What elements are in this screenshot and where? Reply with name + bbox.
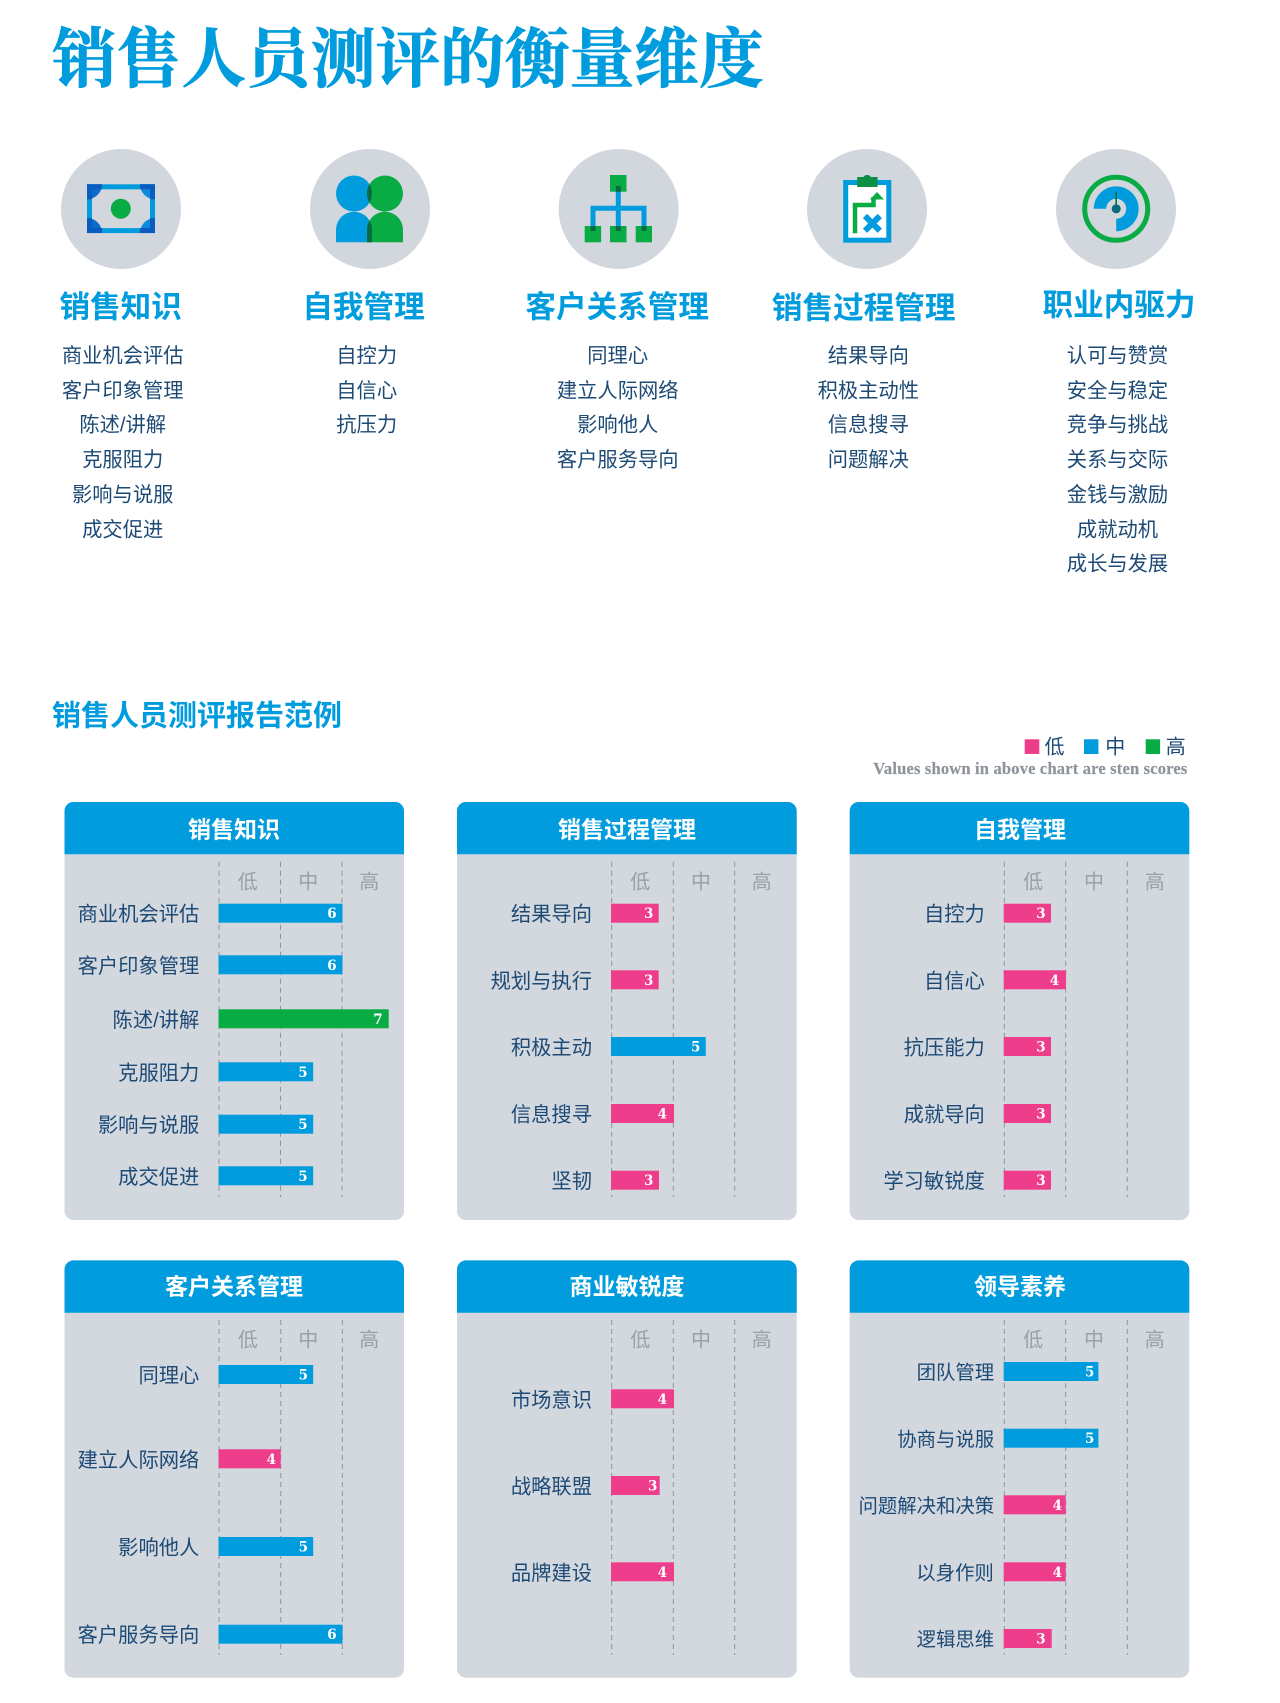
list: 积极主动性 [818, 379, 919, 402]
row [924, 903, 1051, 926]
list: 影响他人 [577, 414, 658, 437]
scale header: 中 [1084, 870, 1104, 893]
row: 品牌建设 [511, 1562, 592, 1585]
scale header [1023, 870, 1165, 893]
scale header [630, 870, 772, 893]
list: 信息搜寻 [828, 414, 909, 437]
legend: 中 [1105, 736, 1125, 759]
scale header: 中 [298, 870, 318, 893]
panel: 领导素养 [850, 1260, 1189, 1678]
legend: 低 [1044, 736, 1064, 759]
scale header: 高 [752, 870, 772, 893]
column: 客户关系管理 [525, 149, 709, 472]
list: 结果导向 [828, 345, 909, 368]
heading: 自我管理 [302, 291, 425, 325]
row [78, 1449, 281, 1472]
row [924, 970, 1066, 993]
icon: gauge [1056, 149, 1176, 269]
row: 3 [1036, 1173, 1046, 1189]
scale header: 中 [691, 870, 711, 893]
scale header: 低 [238, 870, 258, 893]
row: 团队管理 [917, 1362, 994, 1384]
row: 以身作则 [916, 1562, 994, 1584]
scale header: 高 [1145, 1329, 1165, 1352]
list [336, 345, 397, 437]
row: 商业机会评估 [78, 903, 199, 926]
row [897, 1429, 1098, 1451]
scale header: 中 [691, 1329, 711, 1352]
row [511, 903, 659, 926]
heading: 销售过程管理 [772, 291, 955, 325]
panel: 客户关系管理 [64, 1260, 404, 1678]
row: 问题解决和决策 [858, 1496, 994, 1518]
icon: org chart [559, 149, 679, 269]
column: 自我管理 [302, 149, 430, 437]
row: 成交促进 [118, 1166, 199, 1189]
scale header [630, 1329, 772, 1352]
list [818, 345, 919, 472]
icon: clipboard [807, 149, 927, 269]
list [557, 346, 679, 472]
row [118, 1166, 313, 1189]
scale header: 低 [630, 870, 650, 893]
list: 自控力 [336, 345, 397, 368]
row: 客户服务导向 [78, 1624, 199, 1647]
row [551, 1170, 659, 1193]
list: 商业机会评估 [62, 345, 184, 368]
scale header [238, 870, 379, 893]
list: 成长与发展 [1067, 552, 1168, 575]
row [113, 1009, 389, 1032]
list: 客户印象管理 [62, 379, 184, 402]
row: 4 [1053, 1565, 1062, 1581]
list [1067, 345, 1168, 575]
row: 3 [1036, 1040, 1046, 1056]
row: 6 [327, 958, 337, 974]
list [62, 345, 184, 541]
row: 4 [1050, 973, 1059, 989]
row: 3 [648, 1478, 657, 1494]
scale header [1023, 1329, 1165, 1352]
scale header: 高 [752, 1329, 772, 1352]
panel: 自我管理 [850, 802, 1189, 1220]
row: 5 [1085, 1431, 1094, 1447]
row [883, 1170, 1051, 1193]
row [78, 903, 342, 926]
row: 4 [267, 1452, 276, 1468]
heading: 客户关系管理 [525, 291, 709, 325]
list: 同理心 [587, 346, 648, 368]
row: 抗压能力 [904, 1036, 985, 1060]
row [916, 1562, 1066, 1584]
row: 5 [691, 1040, 700, 1056]
row: 3 [1036, 1632, 1046, 1648]
row: 规划与执行 [491, 970, 592, 993]
row: 市场意识 [511, 1389, 592, 1412]
scale header [238, 1329, 379, 1352]
list: 竞争与挑战 [1067, 414, 1168, 437]
row: 7 [373, 1012, 383, 1028]
row: 影响与说服 [98, 1114, 199, 1137]
list: 成交促进 [82, 518, 163, 541]
scale header: 高 [359, 1329, 379, 1352]
row: 陈述/讲解 [113, 1009, 199, 1032]
list: 克服阻力 [82, 449, 163, 472]
row: 3 [644, 973, 653, 989]
heading: 销售知识 [60, 291, 182, 325]
row: 战略联盟 [511, 1476, 592, 1498]
row [511, 1476, 660, 1498]
row: 影响他人 [118, 1536, 199, 1560]
scale header: 低 [238, 1329, 258, 1352]
panel title: 客户关系管理 [165, 1273, 303, 1299]
row [511, 1036, 706, 1060]
row: 成就导向 [904, 1104, 985, 1126]
list: 陈述/讲解 [79, 414, 166, 437]
panel title: 领导素养 [974, 1273, 1066, 1299]
row: 4 [658, 1565, 667, 1581]
row: 同理心 [138, 1366, 199, 1388]
scale header: 中 [298, 1329, 318, 1352]
panel title: 销售过程管理 [558, 816, 696, 842]
row: 结果导向 [511, 903, 592, 926]
legend note: Values shown in above chart are sten scores [873, 759, 1188, 778]
row: 建立人际网络 [78, 1449, 199, 1472]
list: 客户服务导向 [557, 449, 679, 472]
row [138, 1365, 313, 1388]
row: 4 [1053, 1498, 1062, 1514]
row: 5 [298, 1169, 308, 1185]
scale header: 低 [1023, 870, 1043, 893]
row [511, 1104, 674, 1126]
list: 自信心 [336, 379, 397, 402]
column: 销售知识 [60, 149, 184, 541]
list: 影响与说服 [72, 483, 173, 506]
row: 4 [658, 1106, 667, 1122]
panel title: 销售知识 [188, 816, 280, 842]
list: 安全与稳定 [1067, 379, 1168, 402]
row: 5 [298, 1117, 308, 1133]
list: 建立人际网络 [557, 379, 679, 402]
row: 学习敏锐度 [883, 1170, 985, 1193]
scale header: 高 [1145, 870, 1165, 893]
row: 客户印象管理 [78, 955, 199, 978]
row [98, 1114, 313, 1137]
row [858, 1495, 1066, 1518]
row: 自信心 [924, 970, 985, 993]
row [511, 1389, 674, 1412]
row: 3 [644, 906, 653, 922]
row: 5 [298, 1065, 308, 1081]
list: 金钱与激励 [1067, 483, 1168, 506]
row [917, 1362, 1098, 1384]
column: 销售过程管理 [772, 149, 955, 472]
legend [1025, 736, 1186, 759]
row: 克服阻力 [118, 1062, 199, 1085]
row [904, 1104, 1051, 1126]
list: 认可与赞赏 [1067, 345, 1168, 368]
icon: banknote [61, 149, 181, 269]
panel: 销售过程管理 [457, 802, 797, 1220]
scale header: 中 [1084, 1329, 1104, 1352]
list: 抗压力 [336, 414, 397, 437]
row: 逻辑思维 [917, 1629, 994, 1651]
panel: 销售知识 [64, 802, 404, 1220]
row: 信息搜寻 [511, 1104, 592, 1126]
row: 6 [327, 1627, 337, 1643]
row: 6 [327, 906, 337, 922]
row [904, 1036, 1051, 1060]
row [78, 1624, 342, 1647]
row: 3 [1036, 1106, 1046, 1122]
row: 5 [299, 1368, 308, 1384]
scale header: 低 [630, 1329, 650, 1352]
icon: two people [310, 149, 430, 269]
panel title: 自我管理 [974, 816, 1066, 842]
heading: 职业内驱力 [1043, 288, 1195, 322]
row [118, 1062, 313, 1085]
row: 5 [1085, 1364, 1094, 1380]
row: 3 [644, 1173, 653, 1189]
section heading: 销售人员测评报告范例 [52, 700, 342, 733]
scale header: 高 [359, 870, 379, 893]
list: 关系与交际 [1067, 449, 1168, 472]
row: 积极主动 [511, 1036, 592, 1060]
row [491, 970, 659, 993]
legend: 高 [1166, 736, 1186, 759]
row [118, 1536, 313, 1560]
row: 4 [658, 1392, 667, 1408]
list: 问题解决 [828, 449, 909, 472]
panel title: 商业敏锐度 [570, 1273, 684, 1299]
panel: 商业敏锐度 [457, 1260, 797, 1678]
row [511, 1562, 674, 1585]
scale header: 低 [1023, 1329, 1043, 1352]
row: 坚韧 [551, 1170, 592, 1193]
row [917, 1629, 1052, 1651]
row: 3 [1036, 906, 1046, 922]
row [78, 955, 342, 978]
title: 销售人员测评的衡量维度 [52, 24, 764, 96]
column: 职业内驱力 [1043, 149, 1195, 575]
row: 自控力 [924, 903, 985, 926]
row: 5 [299, 1540, 308, 1556]
list: 成就动机 [1077, 518, 1158, 541]
row: 协商与说服 [897, 1429, 994, 1451]
